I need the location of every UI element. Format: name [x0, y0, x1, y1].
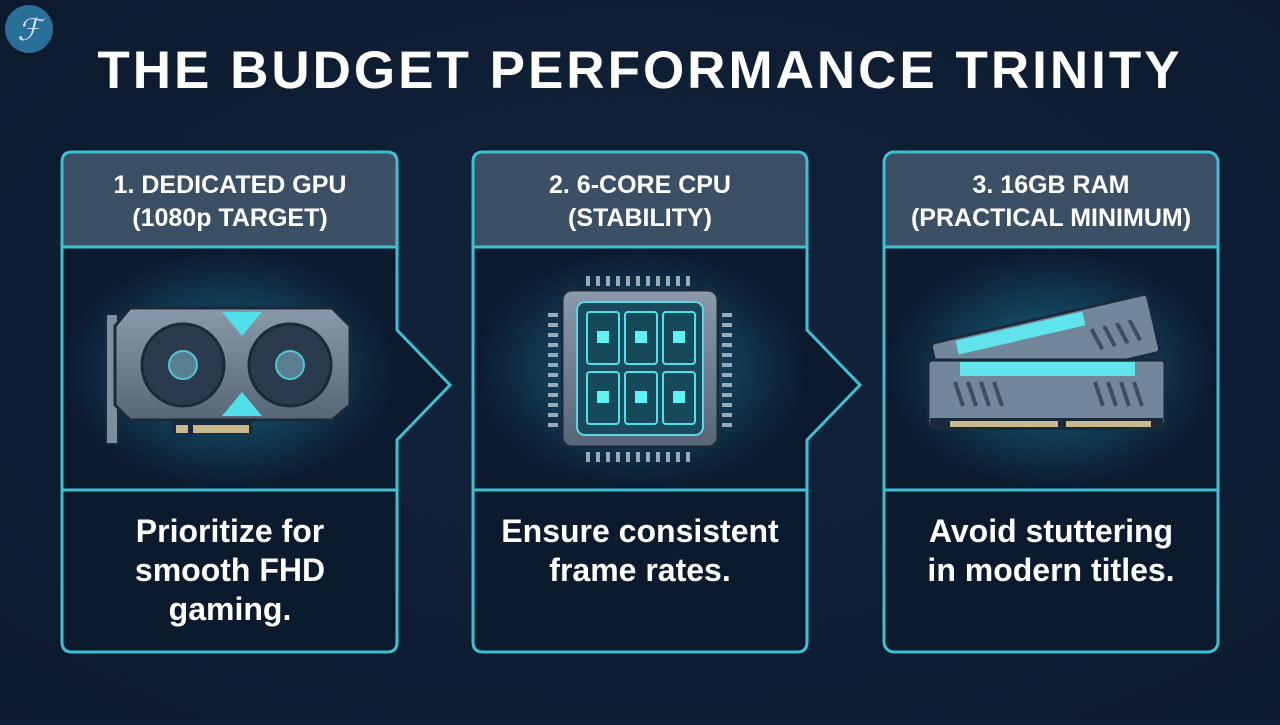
logo — [5, 5, 53, 53]
header: RAM: 3. 16GB RAM — [973, 171, 1129, 199]
header: CPU: (STABILITY) — [568, 204, 712, 232]
icon: graphics card — [106, 308, 350, 444]
icon: CPU chip — [548, 276, 732, 462]
text: GPU description: smooth FHD — [135, 552, 325, 588]
panel: GPU — [62, 152, 450, 652]
text: CPU description: frame rates. — [549, 552, 731, 588]
text: GPU description: Prioritize for — [136, 513, 324, 549]
header: RAM: (PRACTICAL MINIMUM) — [911, 204, 1191, 232]
panel: CPU — [473, 152, 860, 652]
icon: RAM sticks — [928, 294, 1165, 430]
header: CPU: 2. 6-CORE CPU — [549, 171, 731, 199]
text: CPU description: Ensure consistent — [501, 513, 779, 549]
logo: ℱ — [17, 14, 46, 47]
title: THE BUDGET PERFORMANCE TRINITY — [97, 41, 1183, 100]
text: GPU description: gaming. — [169, 591, 291, 627]
text: GPU description — [135, 513, 325, 627]
text: RAM description — [927, 513, 1175, 588]
text: RAM description: in modern titles. — [927, 552, 1175, 588]
header: RAM — [911, 171, 1191, 232]
header: GPU: 1. DEDICATED GPU — [114, 171, 346, 199]
header: CPU — [549, 171, 731, 232]
header: GPU: (1080p TARGET) — [132, 204, 328, 232]
text: CPU description — [501, 513, 779, 588]
text: RAM description: Avoid stuttering — [929, 513, 1173, 549]
panel: RAM — [884, 152, 1218, 652]
header: GPU — [114, 171, 346, 232]
